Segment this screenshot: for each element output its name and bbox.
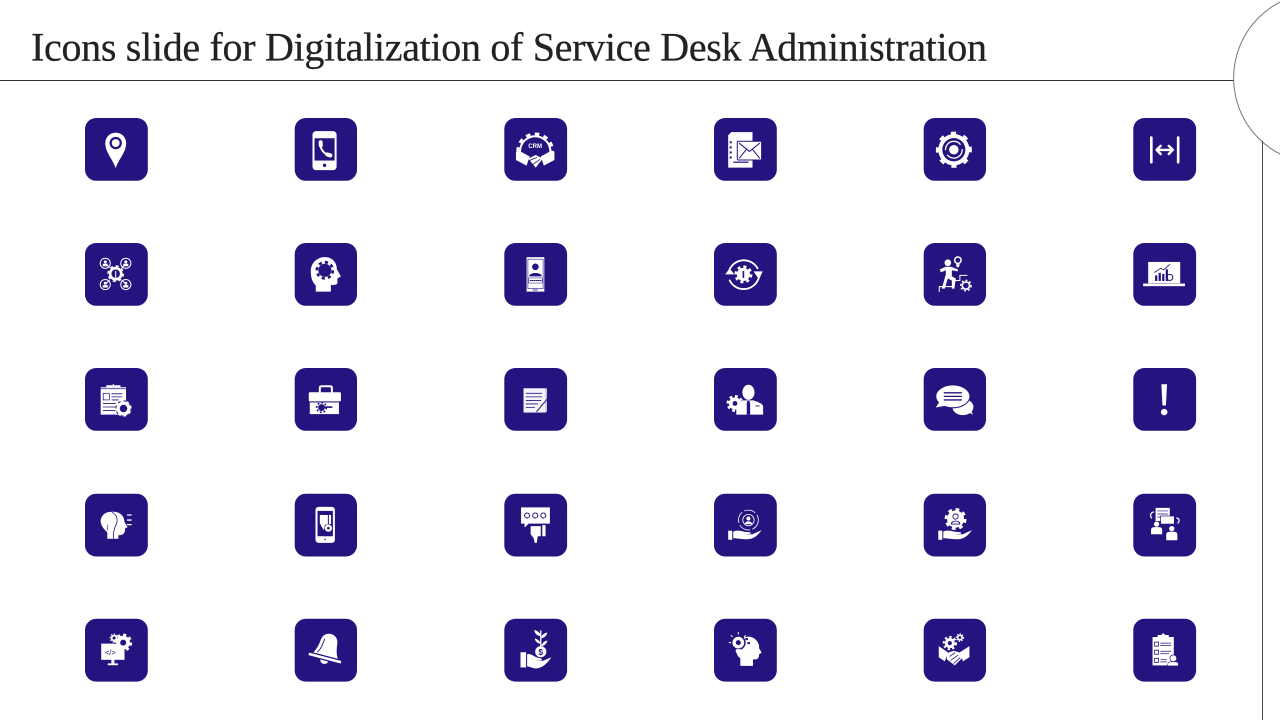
icon: head with gear	[295, 243, 357, 306]
icon: star rating dislike	[504, 494, 567, 557]
icon: hand holding user gear	[924, 494, 986, 557]
icon: document and envelope	[714, 118, 777, 181]
icon: coding monitor with gears: </>	[105, 648, 116, 657]
corner circle	[1234, 0, 1280, 163]
icon: laptop growth chart	[1133, 243, 1196, 306]
icon: speech bubbles	[924, 368, 986, 431]
icon: gear network of people	[85, 243, 148, 306]
icon: hand with money plant	[504, 619, 567, 682]
icon: phone login profile	[504, 243, 567, 306]
icon: bulb and head	[85, 494, 148, 557]
title: Icons slide for Digitalization of Service Desk Administration	[31, 24, 987, 70]
icon: two people discussing documents	[1133, 494, 1196, 557]
icon: coding monitor with gears	[85, 619, 148, 682]
icon: head with bulb gear	[714, 619, 777, 682]
icon: phone with dislike	[295, 494, 357, 557]
icon: hand with rotating user	[714, 494, 777, 557]
icon: hand with money plant: $	[539, 648, 544, 657]
icon: gear with cycle arrows	[714, 243, 777, 306]
icon: clipboard with gear	[85, 368, 148, 431]
right vertical rule	[1262, 141, 1264, 720]
icon: handshake with gears	[924, 619, 986, 682]
icon: notification bell	[295, 619, 357, 682]
icon: CRM gear handshake: CRM	[528, 144, 542, 150]
icon: checklist clipboard with user	[1133, 619, 1196, 682]
icon: businessman with gear	[714, 368, 777, 431]
icon: width arrows	[1133, 118, 1196, 181]
icon: CRM gear handshake	[504, 118, 567, 181]
icon: person climbing steps	[924, 243, 986, 306]
icon: gear with cycle	[924, 118, 986, 181]
header rule	[0, 80, 1234, 82]
icon: toolbox with gear	[295, 368, 357, 431]
icon: exclamation mark	[1133, 368, 1196, 431]
icon: location pin	[85, 118, 148, 181]
icon: smartphone call	[295, 118, 357, 181]
icon: notes with pen	[504, 368, 567, 431]
